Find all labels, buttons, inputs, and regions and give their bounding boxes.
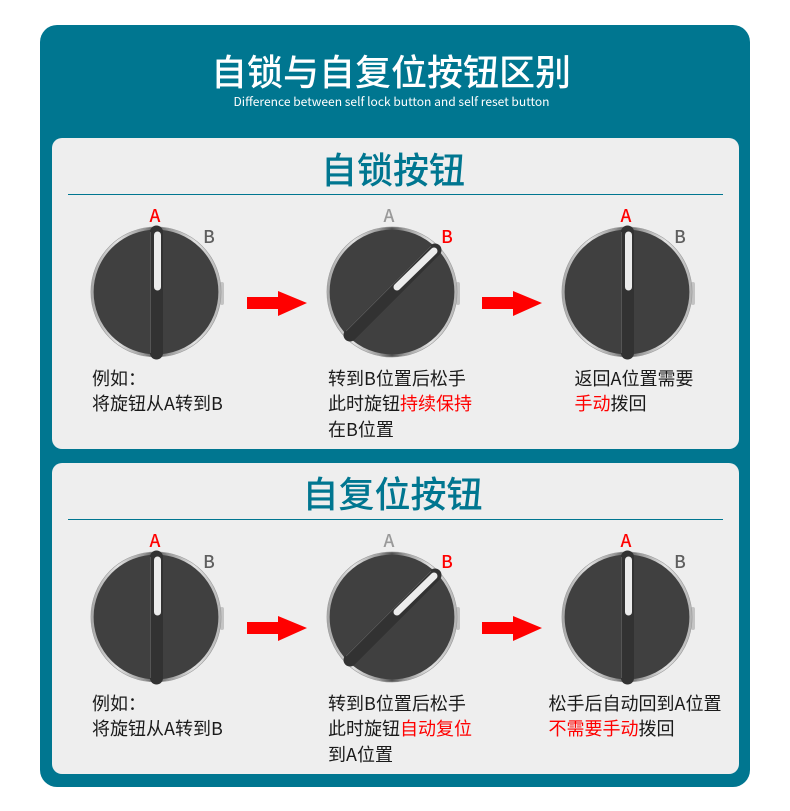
text: step 2: 在B位置 xyxy=(328,416,394,442)
text: step 3: 松手后自动回到A位置 xyxy=(548,690,721,716)
text: step 2: 到A位置 xyxy=(328,741,393,767)
panel: self-lock button xyxy=(52,138,739,449)
text: step 3: 拨回 xyxy=(610,390,646,416)
knob: back to A: A xyxy=(621,203,632,228)
knob: returns to A: A xyxy=(621,528,632,553)
knob: back to A: B xyxy=(674,224,686,249)
knob: position A: A xyxy=(150,203,161,228)
heading: self-lock: 自锁按钮 xyxy=(321,142,465,194)
knob: position B: A xyxy=(384,528,395,553)
text: step 3: 手动 xyxy=(574,390,610,416)
knob: position B: B xyxy=(441,224,453,249)
knob: position A: B xyxy=(203,549,215,574)
text: step 1: 将旋钮从A转到B xyxy=(92,715,223,741)
text: step 3: 不需要手动 xyxy=(548,715,638,741)
arrow xyxy=(482,616,542,641)
subtitle: Difference between self lock button and self reset button xyxy=(234,93,550,110)
knob: position A: A xyxy=(150,528,161,553)
main title: 自锁与自复位按钮区别 xyxy=(211,44,571,96)
knob: position B: B xyxy=(441,549,453,574)
knob: position B xyxy=(327,528,460,682)
knob: position A xyxy=(91,528,224,682)
text: step 2: 此时旋钮自动复位 xyxy=(328,715,472,741)
text: step 1: 例如： xyxy=(92,365,146,391)
knob: returns to A xyxy=(562,528,695,682)
text: step 2: 此时旋钮持续保持 xyxy=(328,390,472,416)
text: step 3: 拨回 xyxy=(638,715,674,741)
arrow xyxy=(247,616,307,641)
arrow xyxy=(482,291,542,316)
heading: self-reset: 自复位按钮 xyxy=(302,466,483,518)
arrow xyxy=(247,291,307,316)
text: step 1: 将旋钮从A转到B xyxy=(92,390,223,416)
knob: returns to A: B xyxy=(674,549,686,574)
text: step 1: 例如： xyxy=(92,690,146,716)
knob: position A: B xyxy=(203,224,215,249)
text: step 3: 返回A位置需要 xyxy=(574,365,693,391)
knob: position A xyxy=(91,203,224,357)
knob: position B: A xyxy=(384,203,395,228)
knob: back to A xyxy=(562,203,695,357)
knob: position B xyxy=(327,203,460,357)
text: step 2: 转到B位置后松手 xyxy=(328,365,466,391)
text: step 2: 转到B位置后松手 xyxy=(328,690,466,716)
panel: self-reset button xyxy=(52,463,739,774)
